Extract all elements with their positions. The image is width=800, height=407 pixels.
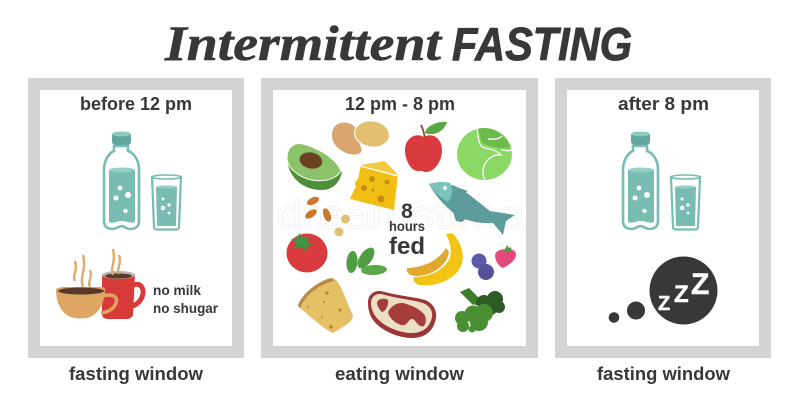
- icon: fish: [429, 182, 515, 235]
- text: 8 hours fed: 8: [401, 200, 413, 223]
- icon: water bottle and glass: [623, 132, 700, 230]
- title: Intermittent: [164, 15, 443, 71]
- icon: raspberry: [495, 245, 516, 268]
- title: FASTING: [452, 18, 632, 70]
- icon: red coffee mug: [102, 249, 143, 319]
- text: 8 hours fed: [389, 200, 425, 260]
- panel: 12 pm - 8 pm: [267, 84, 532, 352]
- icon: bread: [298, 278, 353, 333]
- title: [164, 15, 632, 71]
- icon: sleep bubble: Z: [674, 281, 689, 308]
- icon: cheese: [350, 161, 398, 210]
- icon: steak: [368, 291, 436, 338]
- text: 8 hours fed: fed: [389, 233, 425, 260]
- text: 8 hours fed: hours: [389, 218, 425, 234]
- watermark: dreamstime: [276, 193, 524, 237]
- heading: after 8 pm: after 8 pm: [618, 94, 709, 114]
- text: no milk no shugar: [153, 283, 219, 316]
- icon: sleep bubble: Z: [691, 268, 709, 301]
- text: no milk no shugar: no milk: [153, 283, 201, 298]
- label: fasting window: fasting window: [597, 364, 731, 384]
- icon: blueberries: [472, 254, 494, 280]
- icon: spinach leaves: [346, 245, 387, 276]
- text: no milk no shugar: no shugar: [153, 301, 219, 316]
- label: eating window: eating window: [335, 364, 465, 384]
- icon: banana: [407, 233, 463, 285]
- icon: broccoli: [455, 288, 505, 332]
- icon: cabbage: [457, 128, 512, 180]
- icon: sleep bubble: [609, 256, 718, 324]
- label: fasting window: fasting window: [69, 364, 204, 384]
- panel: after 8 pm: [561, 84, 765, 352]
- icon: almonds and nuts: [304, 195, 350, 236]
- panel: before 12 pm: [34, 84, 238, 352]
- icon: potatoes: [332, 119, 391, 155]
- icon: tomato: [286, 233, 328, 272]
- icon: apple: [405, 122, 447, 172]
- heading: 12 pm - 8 pm: 12 pm - 8 pm: [345, 94, 455, 114]
- heading: before 12 pm: before 12 pm: [80, 94, 192, 114]
- icon: sleep bubble: Z: [658, 293, 670, 315]
- icon: coffee cup: [56, 255, 116, 318]
- icon: water bottle and glass: [104, 132, 181, 230]
- icon: avocado: [287, 144, 342, 190]
